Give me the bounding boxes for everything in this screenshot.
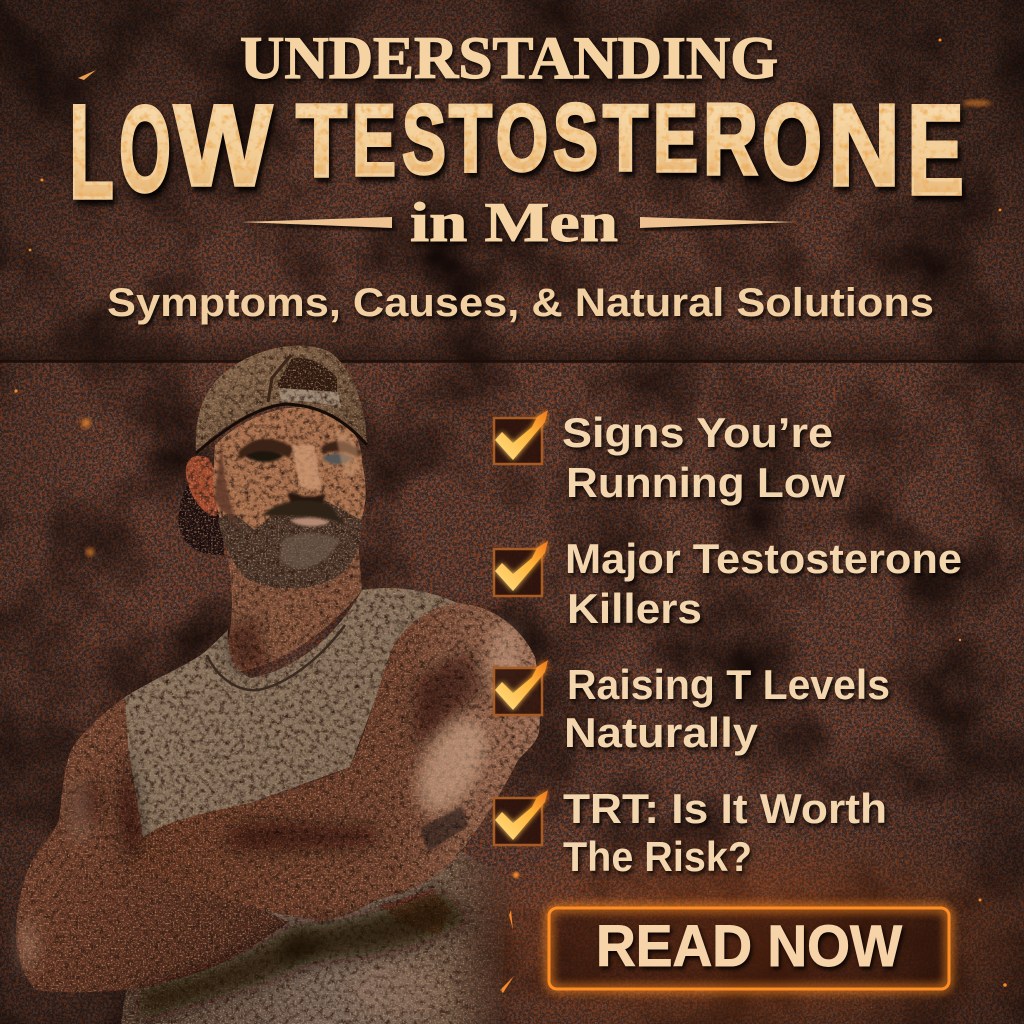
heading: low testosterone: N — [828, 80, 900, 210]
cap panel seam — [268, 355, 291, 402]
item: major testosterone killers — [494, 535, 962, 632]
heading: low testosterone: R — [703, 84, 758, 196]
forearm tattoo — [420, 806, 468, 852]
item text: Running Low — [566, 459, 845, 506]
cap back brim — [178, 455, 224, 555]
call to action button — [549, 908, 949, 989]
item text: Major Testosterone — [565, 535, 962, 582]
heading rule: left — [240, 217, 392, 228]
beard — [218, 498, 362, 588]
muscle highlights — [19, 624, 521, 1018]
item text: Raising T Levels — [567, 661, 890, 708]
icon: glowing checkbox — [494, 410, 548, 464]
heading: understanding: UNDERSTANDING — [240, 25, 778, 91]
shirt collar — [207, 625, 345, 690]
ear — [186, 456, 218, 516]
item: signs you're running low — [494, 409, 845, 506]
face details — [214, 430, 361, 568]
checklist — [494, 409, 962, 880]
heading: low testosterone: S — [553, 84, 598, 189]
item text: Killers — [567, 585, 702, 632]
heading rule: right — [640, 217, 796, 228]
heading: low testosterone: E — [653, 85, 698, 192]
item text: TRT: Is It Worth — [563, 785, 887, 832]
cap brim edge — [196, 404, 367, 453]
heading: low testosterone: T — [603, 85, 648, 190]
face — [213, 407, 366, 582]
title — [69, 25, 964, 325]
heading: low testosterone: L — [69, 78, 114, 227]
neck — [226, 540, 362, 672]
button frame — [549, 908, 949, 989]
left arm — [16, 697, 289, 992]
upper shirt — [125, 588, 457, 837]
item: raising t levels naturally — [494, 660, 890, 756]
icon: glowing checkbox — [494, 660, 548, 715]
heading: low testosterone: O — [496, 85, 548, 190]
subtitle: Symptoms, Causes, & Natural Solutions — [107, 281, 934, 325]
heading: low testosterone: O — [119, 81, 171, 217]
button fill — [549, 908, 949, 989]
heading: low testosterone: W — [174, 82, 272, 210]
muscle and fabric shading — [70, 620, 480, 1020]
cap strap — [279, 388, 341, 408]
heading: low testosterone: T — [296, 83, 347, 198]
item text: Naturally — [564, 709, 759, 756]
heading: low testosterone — [69, 78, 964, 227]
man with cap and crossed arms — [16, 346, 540, 1024]
cap crown — [196, 346, 367, 453]
heading: low testosterone: E — [907, 79, 964, 222]
icon: glowing checkbox — [494, 790, 548, 845]
button label: READ NOW — [596, 914, 902, 979]
body base with grit — [16, 346, 540, 1024]
right arm and forearm — [128, 603, 540, 920]
heading: low testosterone: T — [449, 85, 492, 192]
heading: low testosterone: S — [402, 84, 446, 194]
item text: Signs You’re — [562, 409, 833, 456]
heading: in men: in Men — [410, 192, 618, 254]
item: trt worth the risk — [494, 785, 887, 880]
heading: low testosterone: O — [762, 81, 822, 202]
heading: low testosterone: E — [352, 85, 396, 197]
icon: glowing checkbox — [494, 541, 548, 596]
cap opening — [277, 358, 337, 392]
lower shirt — [121, 850, 508, 1024]
item text: The Risk? — [563, 833, 752, 880]
hand — [380, 890, 450, 935]
